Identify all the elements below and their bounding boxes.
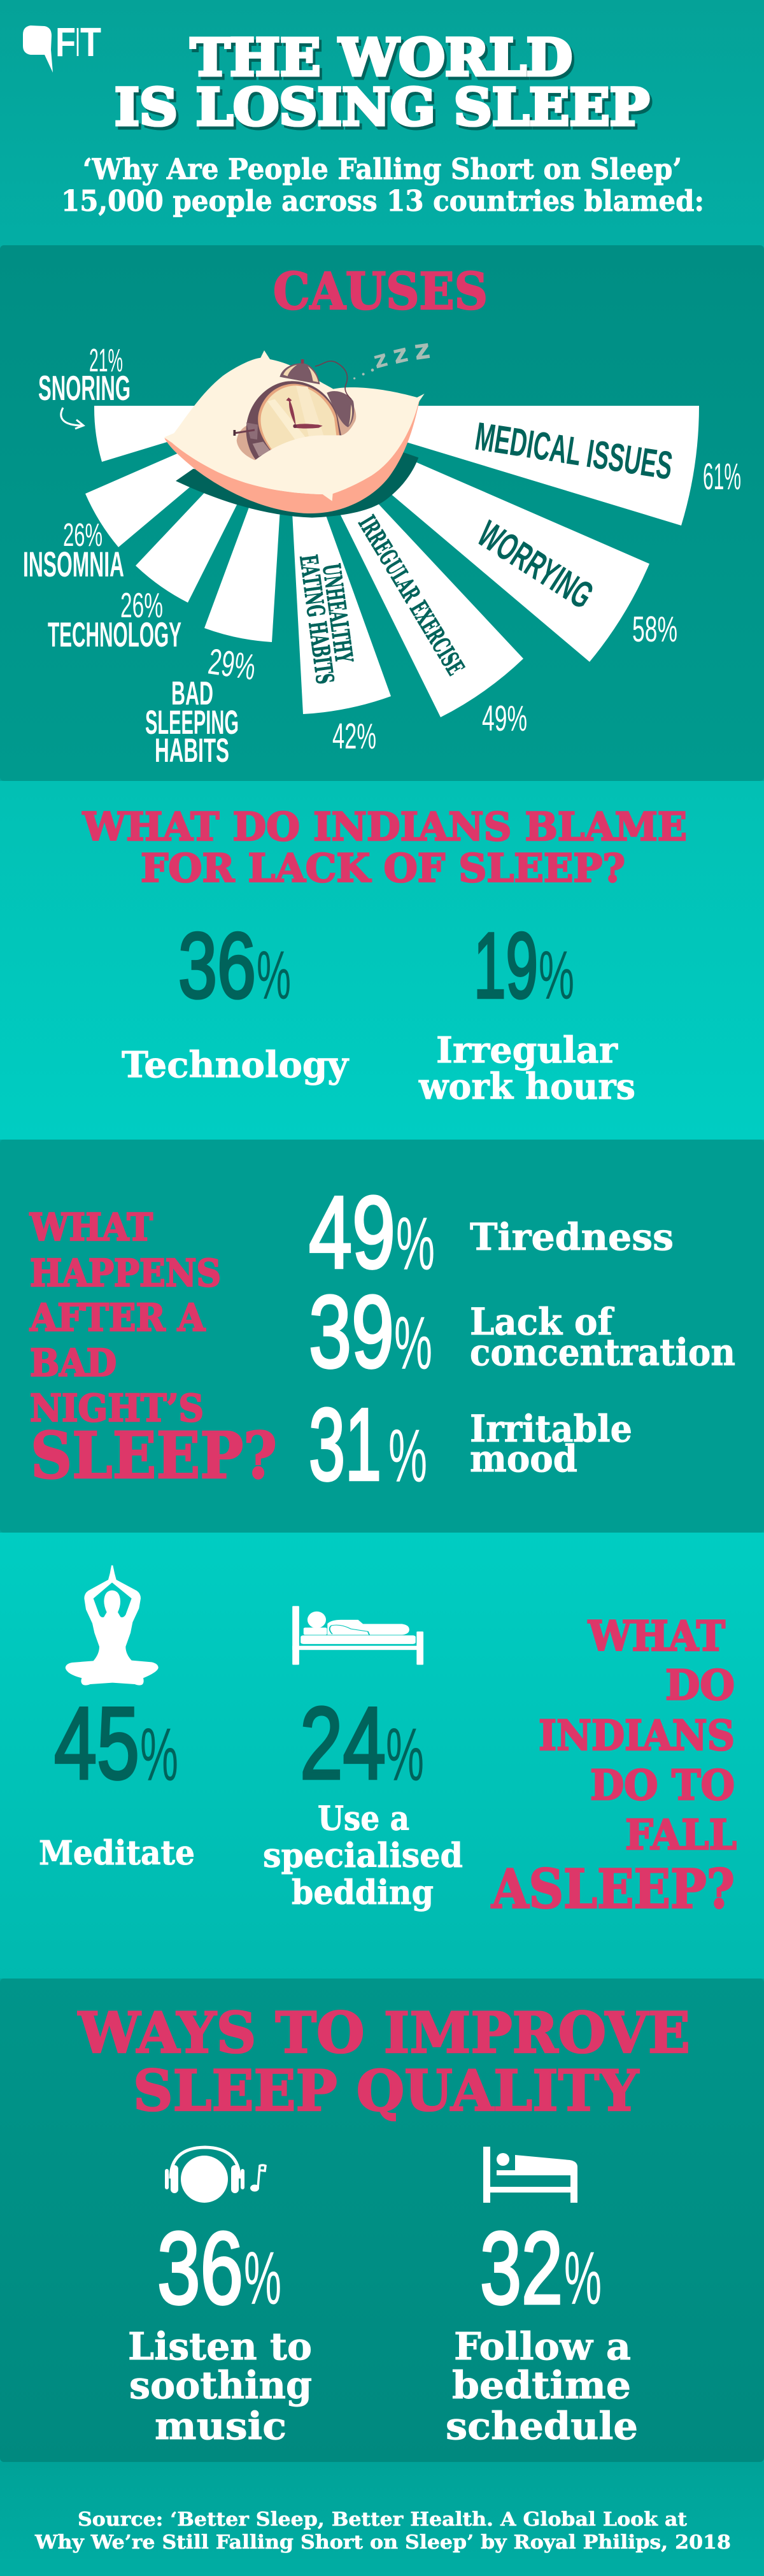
stat: bedtime schedule — [446, 2211, 638, 2448]
stat: specialised bedding: specialised — [263, 1836, 463, 1875]
stat: meditate: Meditate — [39, 1834, 195, 1873]
label: worrying: 58% — [632, 609, 677, 650]
stat: technology: 36 — [178, 913, 256, 1017]
stat: lack of concentration: 39 — [309, 1275, 394, 1389]
stat: bedtime schedule: bedtime — [452, 2363, 631, 2407]
stat: irritable mood: Irritable — [470, 1407, 632, 1450]
heading: HAPPENS — [30, 1251, 221, 1295]
label: insomnia — [23, 517, 124, 584]
panel: causes — [0, 245, 764, 781]
label: bad sleeping habits: SLEEPING — [145, 704, 239, 741]
label: technology: 26% — [120, 585, 163, 625]
stat: irregular work hours: 19 — [474, 913, 538, 1017]
stat: soothing music: soothing — [129, 2363, 312, 2407]
icon: meditating person — [66, 1565, 159, 1685]
heading: SLEEP? — [31, 1418, 277, 1493]
label: unhealthy eating habits: 42% — [332, 716, 376, 757]
snoring z letters — [371, 333, 432, 374]
stat: soothing music: % — [244, 2236, 281, 2321]
stat: irregular work hours: % — [539, 936, 574, 1013]
heading: DO TO — [590, 1761, 735, 1810]
icon: person on bed — [292, 1606, 423, 1664]
subtitle: ‘Why Are People Falling Short on Sleep’ — [83, 152, 682, 186]
stat: irritable mood: mood — [470, 1437, 577, 1480]
stat: lack of concentration: Lack of — [470, 1300, 615, 1343]
panel: after a bad night's sleep — [0, 1140, 764, 1533]
stat: specialised bedding: bedding — [292, 1873, 434, 1912]
heading: WHAT DO INDIANS BLAME — [82, 805, 687, 850]
stat: specialised bedding: 24 — [300, 1686, 386, 1801]
stat: soothing music: Listen to — [128, 2324, 312, 2368]
label: unhealthy eating habits: UNHEALTHY — [317, 562, 359, 664]
stat: tiredness — [309, 1175, 674, 1290]
label: snoring — [38, 342, 131, 429]
logo: FIT — [23, 19, 101, 73]
heading — [491, 1612, 737, 1921]
causes heading: CAUSES — [273, 261, 488, 321]
heading: WHAT — [29, 1205, 153, 1249]
icon: bed — [483, 2147, 577, 2203]
fan chart of causes — [85, 406, 699, 717]
stat: irritable mood: % — [388, 1414, 427, 1498]
stat: bedtime schedule: schedule — [446, 2404, 638, 2448]
stat: bedtime schedule: Follow a — [454, 2324, 631, 2368]
label: bad sleeping habits: BAD — [171, 675, 213, 712]
subtitle — [61, 152, 704, 218]
stat: specialised bedding: % — [386, 1713, 424, 1797]
stat: irritable mood — [309, 1387, 632, 1502]
label: snoring: SNORING — [38, 368, 131, 408]
heading: DO — [665, 1661, 735, 1710]
label: irregular exercise: IRREGULAR EXERCISE — [353, 510, 470, 680]
stat: specialised bedding: Use a — [318, 1800, 409, 1838]
snoring z letters: z — [390, 338, 411, 370]
stat: lack of concentration: concentration — [470, 1331, 735, 1374]
panel: what Indians do to fall asleep — [0, 1533, 764, 1979]
label: unhealthy eating habits — [294, 553, 376, 757]
panel: ways to improve sleep quality — [0, 1979, 764, 2462]
label: bad sleeping habits: 29% — [206, 641, 258, 688]
heading: SLEEP QUALITY — [133, 2057, 639, 2124]
stat: meditate — [39, 1686, 195, 1873]
stat: irritable mood: 31 — [309, 1387, 381, 1502]
stat: meditate: 45 — [54, 1686, 139, 1801]
stat: lack of concentration — [309, 1275, 735, 1389]
stat: soothing music: music — [155, 2404, 286, 2448]
stat: tiredness: % — [396, 1202, 435, 1286]
footer: source: Why We’re Still Falling Short on Sleep’ by Royal Philips, 2018 — [34, 2531, 731, 2554]
label: technology: TECHNOLOGY — [48, 615, 181, 654]
heading: ASLEEP? — [491, 1857, 735, 1921]
panel: what Indians blame — [0, 781, 764, 1140]
label: insomnia: 26% — [63, 517, 103, 553]
heading: AFTER A — [29, 1296, 206, 1340]
subtitle: 15,000 people across 13 countries blamed: — [61, 184, 704, 218]
title: IS LOSING SLEEP — [115, 77, 649, 137]
stat: tiredness: Tiredness — [470, 1215, 674, 1259]
logo: FIT: I — [75, 19, 80, 65]
stat: irregular work hours: work hours — [418, 1066, 635, 1108]
heading: WAYS TO IMPROVE — [78, 2000, 690, 2066]
snoring z letters: z — [412, 333, 432, 367]
heading: FOR LACK OF SLEEP? — [141, 846, 625, 891]
title: THE WORLD — [190, 27, 572, 87]
label: insomnia: INSOMNIA — [23, 544, 124, 584]
title — [115, 27, 649, 137]
illustration: clock on pillow — [164, 333, 432, 518]
stat: lack of concentration: % — [394, 1301, 432, 1385]
label: bad sleeping habits: HABITS — [155, 732, 229, 769]
stat: soothing music — [128, 2211, 312, 2448]
footer: source: Source: ‘Better Sleep, Better Health. A Global Look at — [78, 2508, 687, 2531]
heading — [82, 805, 687, 891]
stat: meditate: % — [140, 1713, 178, 1797]
stat: irregular work hours: Irregular — [436, 1029, 618, 1071]
logo: FIT: T — [80, 19, 101, 65]
label: worrying: WORRYING — [470, 512, 601, 617]
header section — [0, 0, 764, 255]
stat: bedtime schedule: % — [564, 2236, 602, 2321]
heading: INDIANS — [539, 1712, 735, 1760]
label: irregular exercise: 49% — [482, 698, 527, 739]
heading: FALL — [625, 1811, 737, 1859]
heading: WHAT — [588, 1612, 725, 1661]
stat: tiredness: 49 — [309, 1175, 395, 1290]
stat: technology: Technology — [122, 1044, 349, 1086]
label: snoring: 21% — [89, 342, 123, 378]
stat: bedtime schedule: 32 — [480, 2211, 563, 2326]
stat: irregular work hours — [418, 913, 635, 1108]
stat: soothing music: 36 — [157, 2211, 243, 2326]
icon: headphones and music note — [165, 2147, 265, 2203]
label: unhealthy eating habits: EATING HABITS — [294, 553, 340, 685]
stat: technology — [122, 913, 349, 1086]
snoring z letters: z — [371, 345, 390, 374]
heading — [78, 2000, 690, 2124]
heading: NIGHT’S — [30, 1386, 204, 1430]
heading — [29, 1205, 277, 1493]
footer: source — [0, 2462, 764, 2576]
stat: technology: % — [257, 936, 291, 1013]
label: technology — [48, 585, 181, 654]
heading: BAD — [30, 1341, 117, 1385]
logo: FIT: F — [55, 19, 76, 65]
stat: specialised bedding — [263, 1686, 463, 1912]
label: bad sleeping habits — [145, 641, 258, 769]
